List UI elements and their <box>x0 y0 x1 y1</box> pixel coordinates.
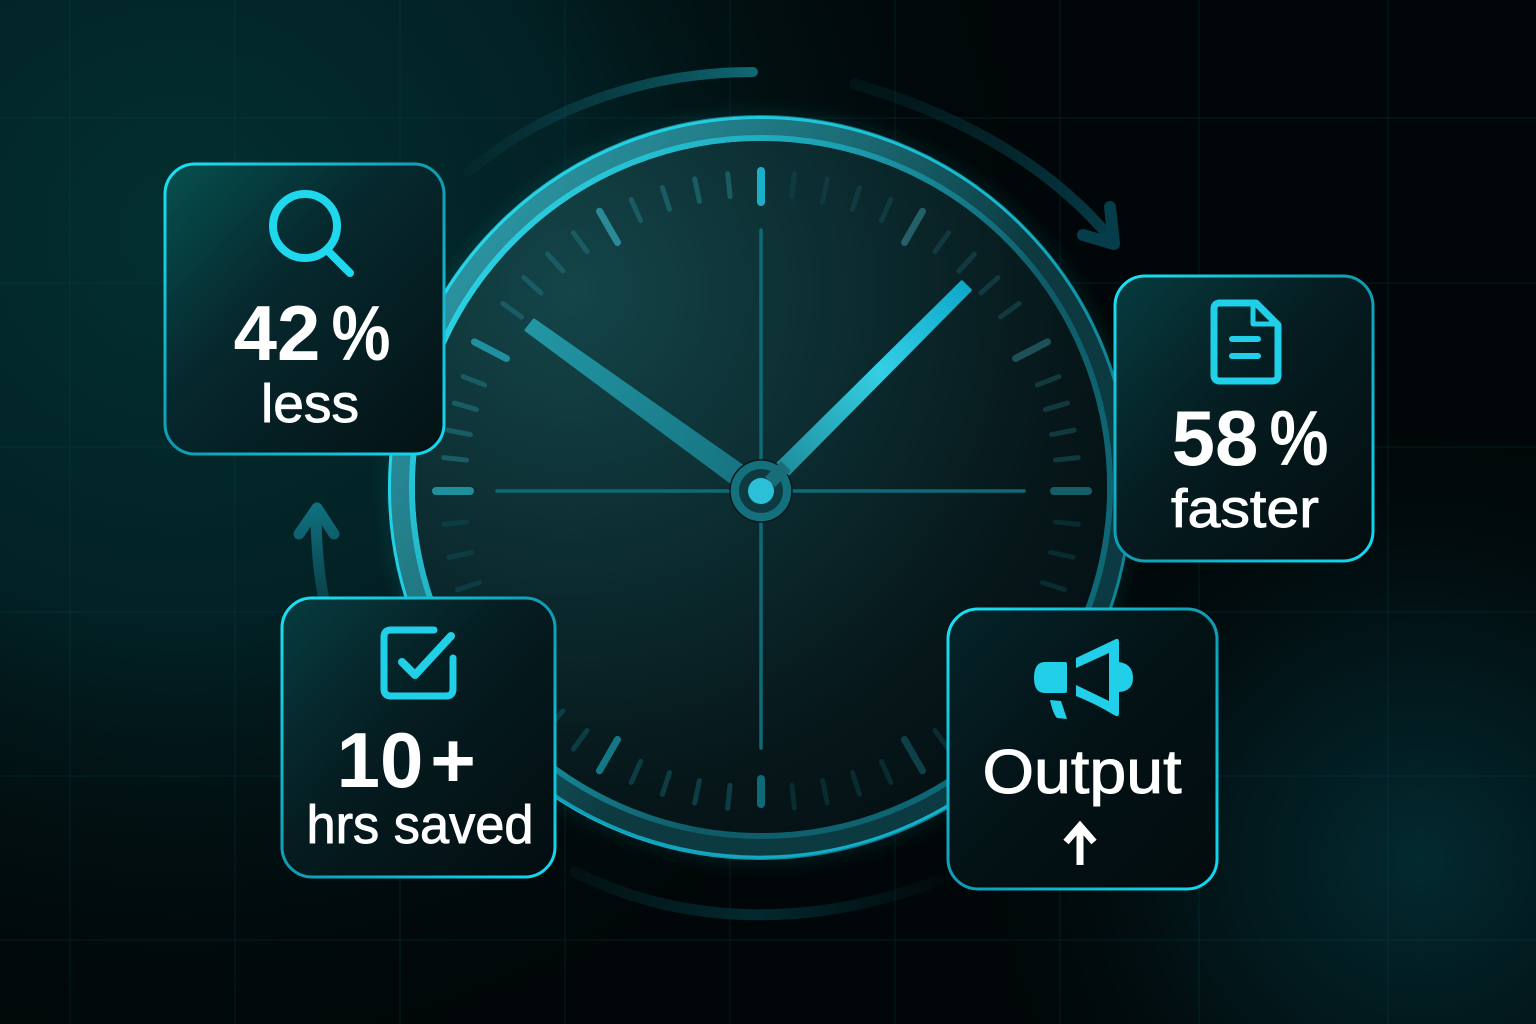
card: output up <box>948 609 1217 889</box>
value: % <box>332 289 390 377</box>
icon: checkbox <box>384 630 453 696</box>
card: 10+ hrs saved <box>282 598 555 877</box>
label: Output <box>982 738 1182 807</box>
label: faster <box>1171 479 1319 539</box>
minute hand <box>526 320 748 486</box>
label: hrs saved <box>306 795 534 855</box>
arrow: right arc <box>855 84 1114 244</box>
medium hour ticks <box>474 211 1048 771</box>
clock face <box>415 141 1107 833</box>
card: 58% faster <box>1115 276 1373 561</box>
clock <box>388 116 1132 860</box>
clock bezel <box>388 116 1132 860</box>
arrow: left up <box>299 508 334 600</box>
crosshair lines <box>497 230 1024 748</box>
cardinal hour ticks <box>436 171 1088 804</box>
value: + <box>430 716 476 804</box>
arrow: top arc <box>468 72 753 172</box>
value <box>234 289 390 377</box>
icon: document <box>1214 303 1278 381</box>
card: 42% less <box>165 164 444 454</box>
value <box>1172 394 1328 482</box>
icon: magnifier <box>273 194 350 273</box>
centre hub <box>730 460 792 522</box>
value: % <box>1270 394 1328 482</box>
label: less <box>261 374 359 434</box>
value: 10 <box>337 716 423 804</box>
icon: up arrow <box>1066 826 1094 865</box>
minor ticks <box>444 174 1078 808</box>
value <box>337 716 476 804</box>
arrow: bottom arc <box>575 872 940 915</box>
value: 58 <box>1172 394 1258 482</box>
icon: megaphone <box>1034 639 1133 719</box>
hour hand <box>770 282 970 482</box>
value: 42 <box>234 289 320 377</box>
